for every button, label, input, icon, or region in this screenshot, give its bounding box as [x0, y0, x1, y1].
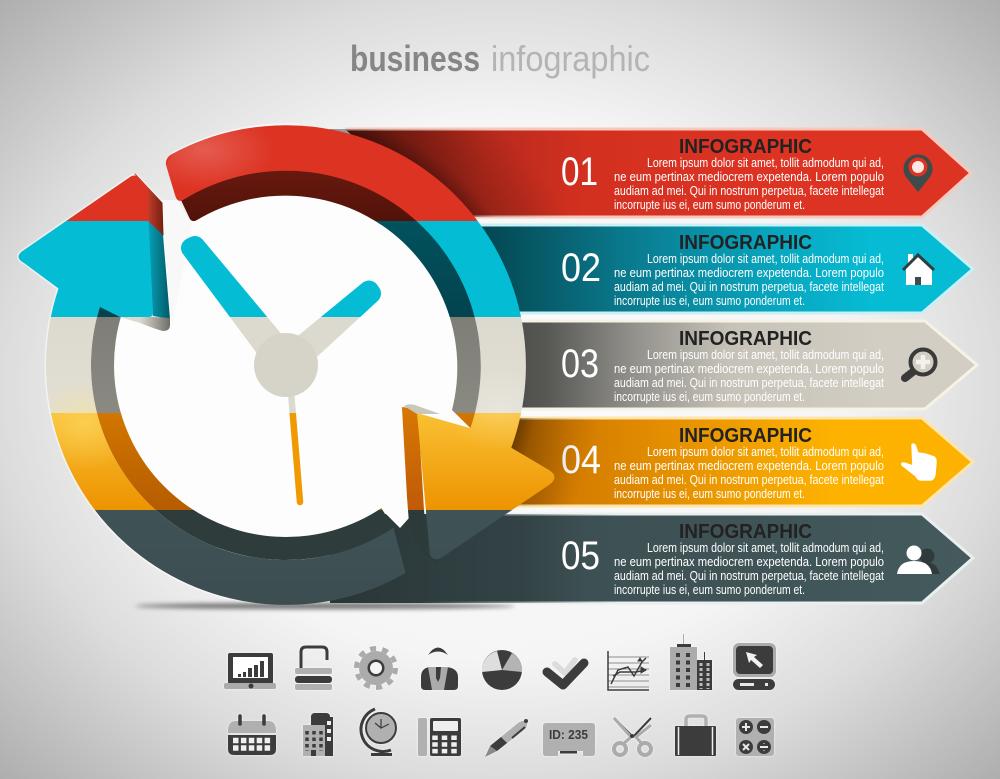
- right arrowhead top edge: [404, 404, 440, 414]
- ribbon 5 body text: Lorem ipsum dolor sit amet, tollit admodum qui ad,: [647, 540, 884, 555]
- icon: line chart: [608, 651, 649, 690]
- icon: math operators: [736, 718, 774, 756]
- icon: laptop: [224, 653, 276, 689]
- icon: gear: [356, 648, 396, 688]
- ribbon 2 shape: [480, 225, 973, 313]
- ring shadow on ribbons: [330, 129, 590, 506]
- icon: house: [903, 254, 934, 285]
- icon: open padlock: [295, 647, 332, 690]
- upper arrow inner bevel: [181, 169, 481, 428]
- ribbon 5: [330, 514, 973, 603]
- ribbon 2 body text: incorrupte ius ei, eum sumo ponderum et.: [614, 293, 805, 308]
- icon: scissors: [614, 718, 651, 755]
- ribbon 1 number: 01: [561, 150, 598, 194]
- icon: calendar: [228, 716, 276, 755]
- icon: globe clock: [361, 709, 396, 756]
- ribbon 3 body text: audiam ad mei. Qui in nostrum perpetua, facete intellegat: [614, 375, 884, 390]
- icon: check mark: [547, 660, 584, 685]
- icon: skyscrapers: [670, 634, 712, 690]
- ground shadow: [135, 603, 515, 609]
- ribbon 4 body text: incorrupte ius ei, eum sumo ponderum et.: [614, 486, 805, 501]
- ribbon 2: [480, 225, 973, 313]
- ribbon 4 shape: [500, 418, 973, 506]
- clock hub: [254, 333, 318, 397]
- gap between arrows at lower right: [380, 400, 409, 528]
- ribbon 2 body text: [614, 251, 884, 308]
- title: business: [350, 38, 480, 79]
- icon: id badge: [543, 723, 595, 756]
- ribbon 1 body text: ne eum pertinax mediocrem expetenda. Lorem populo: [614, 169, 884, 184]
- ribbon 3 body text: [614, 347, 884, 404]
- face highlights: [50, 128, 521, 462]
- ribbon 4: [500, 418, 973, 506]
- ribbon 1 heading: INFOGRAPHIC: [679, 136, 812, 158]
- ribbon 3 body text: ne eum pertinax mediocrem expetenda. Lorem populo: [614, 361, 884, 376]
- ribbon 2 body text: Lorem ipsum dolor sit amet, tollit admodum qui ad,: [647, 251, 884, 266]
- clock hand: long: [191, 246, 291, 369]
- icon: pointing hand: [902, 444, 936, 480]
- clock face: [113, 192, 459, 538]
- title: [350, 38, 650, 79]
- ribbon 3 body text: incorrupte ius ei, eum sumo ponderum et.: [614, 389, 805, 404]
- ribbon 4 body text: Lorem ipsum dolor sit amet, tollit admodum qui ad,: [647, 444, 884, 459]
- ribbon 4 body text: audiam ad mei. Qui in nostrum perpetua, facete intellegat: [614, 472, 884, 487]
- title: infographic: [491, 38, 650, 79]
- icon: pie chart: [482, 650, 522, 690]
- clock with circular arrows: [18, 110, 555, 605]
- lower arrow inner bevel: [91, 303, 393, 560]
- ring white halo: [18, 125, 406, 605]
- left arrowhead red bevel: [135, 174, 163, 235]
- clock hand: short: [283, 290, 371, 369]
- ribbon 1: [345, 129, 971, 217]
- ribbon 5 number: 05: [561, 534, 600, 578]
- icon: people: [897, 546, 940, 574]
- icon: pen: [485, 719, 528, 757]
- left arrowhead lower edge: [120, 317, 170, 331]
- ribbon 5 body text: [614, 540, 884, 597]
- right arrowhead side bevel: [403, 408, 437, 562]
- icon: computer with cursor: [733, 643, 776, 690]
- ribbon 3 number: 03: [561, 342, 599, 386]
- ribbon 1 body text: incorrupte ius ei, eum sumo ponderum et.: [614, 197, 805, 212]
- icon: briefcase: [675, 716, 716, 756]
- ribbon 1 shape: [345, 129, 971, 217]
- ribbon 2 heading: INFOGRAPHIC: [679, 232, 812, 254]
- ribbon 2 body text: audiam ad mei. Qui in nostrum perpetua, facete intellegat: [614, 279, 884, 294]
- ribbon 5 heading: INFOGRAPHIC: [679, 521, 812, 543]
- icon: office building: [303, 713, 333, 756]
- clock hand: thin: [290, 380, 300, 502]
- ribbon 4 body text: [614, 444, 884, 501]
- ribbon 2 number: 02: [561, 246, 601, 290]
- icon: map pin: [904, 154, 932, 192]
- upper arrow face: [166, 125, 554, 559]
- icon: calculator: [418, 718, 461, 756]
- ribbon 4 heading: INFOGRAPHIC: [679, 425, 812, 447]
- ribbon 3: [500, 321, 977, 409]
- ribbon 1 body text: audiam ad mei. Qui in nostrum perpetua, facete intellegat: [614, 183, 884, 198]
- ribbon 5 body text: incorrupte ius ei, eum sumo ponderum et.: [614, 582, 805, 597]
- ribbon 4 number: 04: [561, 438, 601, 482]
- ribbon 3 shape: [500, 321, 977, 409]
- ribbon 4 body text: ne eum pertinax mediocrem expetenda. Lorem populo: [614, 458, 884, 473]
- ribbon 3 heading: INFOGRAPHIC: [679, 328, 812, 350]
- ribbon 5 shape: [330, 514, 973, 603]
- icon: magnifier: [905, 350, 936, 378]
- ribbon 1 body text: [614, 155, 884, 212]
- ribbon 5 body text: audiam ad mei. Qui in nostrum perpetua, facete intellegat: [614, 568, 884, 583]
- gap between arrows at upper left: [161, 200, 192, 325]
- icon: id badge: ID: 235: [549, 727, 588, 742]
- ribbon 5 body text: ne eum pertinax mediocrem expetenda. Lorem populo: [614, 554, 884, 569]
- ribbon 1 body text: Lorem ipsum dolor sit amet, tollit admodum qui ad,: [647, 155, 884, 170]
- left arrowhead cyan bevel: [147, 220, 170, 319]
- icon: businessman: [421, 648, 458, 690]
- lower arrow face: [18, 176, 406, 605]
- ribbon 3 body text: Lorem ipsum dolor sit amet, tollit admodum qui ad,: [647, 347, 884, 362]
- ribbon 2 body text: ne eum pertinax mediocrem expetenda. Lorem populo: [614, 265, 884, 280]
